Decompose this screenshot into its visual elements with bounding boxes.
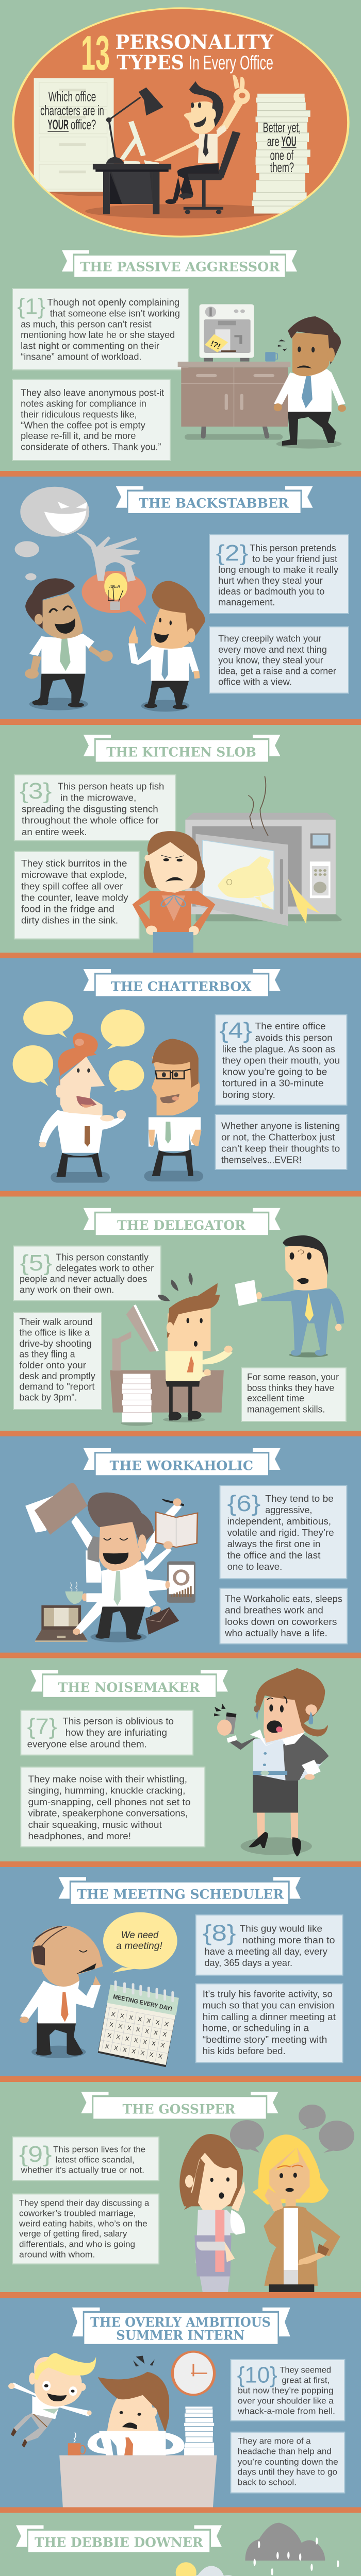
illustration: two gossiping women (179, 2105, 354, 2292)
heading: the meeting scheduler: THE MEETING SCHEDULER (77, 1887, 284, 1902)
text box: headache: days until they have to go (238, 2467, 337, 2477)
text box: make noise: headphones, and more! (28, 1831, 131, 1841)
text box: 5 (13, 1246, 161, 1300)
text box: 7: {7} (27, 1714, 57, 1739)
heading: the backstabber (116, 486, 313, 513)
text box: favorite activity (196, 1984, 343, 2063)
section: the delegator (0, 1196, 361, 1436)
text box: steal your idea: every move and next thing (218, 645, 327, 655)
text box: headache: They are more of a (238, 2436, 311, 2446)
bubble text: We need (121, 1930, 159, 1941)
text box: 6: {6} (227, 1491, 260, 1516)
text box: 8: nothing more than to (242, 1935, 335, 1945)
text box: can't keep thoughts (216, 1114, 347, 1170)
text box: burritos: dirty dishes in the sink. (21, 915, 118, 925)
text box: 4: {4} (219, 1018, 252, 1043)
text box: 10: but now they’re popping (238, 2386, 334, 2396)
calendar text: XXXXXXX (109, 2021, 168, 2038)
text box: 4: The entire office (255, 1021, 326, 1031)
illustration: boss handing work to stressed worker (110, 1235, 344, 1426)
text box: 7: This person is oblivious to (62, 1716, 174, 1726)
title: In Every Office (189, 52, 273, 74)
text box: 4: like the plague. As soon as (222, 1044, 335, 1054)
heading: the gossiper: THE GOSSIPER (123, 2102, 235, 2116)
calendar text: XXXXXXX (110, 2010, 169, 2028)
text box: 5: This person constantly (56, 1252, 149, 1263)
text box: eats sleeps breathes: who actually have a life. (224, 1628, 327, 1638)
text box: post-it notes: their ridiculous requests like, (21, 409, 137, 419)
text box: 4: boring story. (222, 1090, 275, 1100)
illustration: woman shouting on phone (214, 1668, 329, 1857)
section: the backstabber (0, 477, 361, 725)
bubble text (116, 1930, 162, 1952)
text box: can't keep thoughts: themselves...EVER! (221, 1155, 302, 1165)
text box: 1: “insane” amount of workload. (21, 351, 142, 362)
text box: favorite activity: “bedtime story” meeting with (203, 2035, 327, 2045)
illustration: confused man and raincloud woman (155, 2523, 340, 2576)
text box: headache: back to school. (238, 2477, 297, 2487)
hero circle illustration (13, 8, 348, 236)
section: the gossiper (0, 2082, 361, 2298)
text box: make noise: They make noise with their whistling, (28, 1774, 187, 1785)
text box: eats sleeps breathes: looks down on coworkers (225, 1617, 337, 1627)
text box: headache: headache than help and (238, 2446, 332, 2456)
text box: burritos: microwave that explode, (21, 870, 127, 880)
question on paper stack: YOU (282, 133, 296, 149)
text box: steal your idea: you know, they steal your (218, 655, 323, 666)
text box: favorite activity: him calling a dinner meeting at (203, 2012, 336, 2022)
question on paper stack: Better yet, (263, 120, 301, 135)
text box: drive-by shooting: back by 3pm". (20, 1392, 77, 1402)
text box: 1 (12, 289, 188, 370)
text box: discussing coworkers (12, 2194, 159, 2264)
text box: 1: that someone else isn’t working (50, 308, 180, 318)
text box: can't keep thoughts: can’t keep their thoughts to (221, 1144, 340, 1154)
text box: make noise: gum-snapping, cell phones not set to (28, 1797, 191, 1807)
heading: the overly ambitious summer intern (72, 2308, 290, 2344)
section: the noisemaker (0, 1658, 361, 1867)
text box: 2: ideas or badmouth you to (218, 586, 324, 597)
question on filing cabinet: characters are in (40, 103, 104, 118)
text box: drive-by shooting: desk and promptly (20, 1371, 95, 1381)
text box: steal your idea: office with a view. (218, 676, 292, 687)
text box: post-it notes: They also leave anonymous post-it (21, 387, 164, 398)
text box: make noise: singing, humming, knuckle cracking, (28, 1786, 185, 1796)
text box: 5: {5} (20, 1250, 52, 1276)
text box: time management: For some reason, your (247, 1372, 339, 1382)
text box: 1: as much, this person can’t resist (21, 319, 152, 330)
text box: 5: people and never actually does (20, 1274, 147, 1284)
text box: 4: they open their mouth, you (222, 1055, 340, 1065)
calendar text: XXXXXXX (104, 2043, 163, 2060)
illustration: meeting man, bubble and calendar (20, 1912, 179, 2067)
illustration: multitasking workaholic (25, 1483, 198, 1642)
heading: the overly ambitious summer intern: THE OVERLY AMBITIOUS (90, 2315, 271, 2330)
text box: 3: throughout the whole office for (22, 815, 159, 825)
text box: 9: latest office scandal, (56, 2155, 135, 2165)
question on paper stack: them? (270, 160, 294, 175)
text box: make noise (21, 1767, 205, 1847)
text box: 6: the office and the last (227, 1550, 320, 1561)
text box: 2: to be your friend just (252, 554, 337, 564)
question on filing cabinet: YOUR (47, 117, 69, 132)
text box: 5: any work on their own. (20, 1285, 114, 1295)
text box: make noise: chair squeaking, music without (28, 1820, 162, 1830)
text box: burritos (14, 851, 139, 939)
text box: drive-by shooting: as they fling a (20, 1349, 75, 1360)
text box: 9: {9} (19, 2142, 52, 2167)
text box: 8: {8} (203, 1921, 236, 1946)
section: the workaholic (0, 1436, 361, 1658)
text box: drive-by shooting: demand to "report (20, 1382, 95, 1392)
text box: eats sleeps breathes (220, 1588, 347, 1644)
section: the meeting scheduler (0, 1867, 361, 2082)
text box: 2: This person pretends (250, 543, 336, 553)
text box: drive-by shooting: the office is like a (20, 1328, 90, 1338)
text box: 6 (220, 1485, 347, 1579)
text box: 4: know you’re going to be (222, 1066, 327, 1077)
illustration: coffee machine and annoyed man (178, 304, 346, 449)
text box: can't keep thoughts: Whether anyone is listening (221, 1121, 340, 1131)
text box: drive-by shooting: Their walk around (20, 1317, 93, 1327)
question on filing cabinet (40, 89, 104, 132)
text box: 6: They tend to be (265, 1494, 334, 1504)
steam from microwave (248, 776, 268, 836)
section: header and the passive aggressor (0, 0, 361, 477)
heading: the meeting scheduler (59, 1877, 301, 1904)
text box: 2: long enough to make it really (218, 565, 338, 575)
illustration: intern, worker, clock and desk (8, 2352, 217, 2507)
question on filing cabinet: Which office (48, 89, 96, 105)
question on filing cabinet: office? (71, 117, 96, 132)
text box: post-it notes: please re-fill it, and be more (21, 431, 136, 441)
text box: time management: excellent time (247, 1393, 304, 1403)
heading: the chatterbox: THE CHATTERBOX (111, 979, 252, 994)
text box: 3: {3} (20, 778, 52, 804)
text box: post-it notes: “When the coffee pot is empty (21, 420, 145, 431)
text box: 6: volatile and rigid. They’re (227, 1528, 334, 1538)
heading: the debbie downer: THE DEBBIE DOWNER (35, 2535, 203, 2550)
text box: 9 (12, 2137, 159, 2181)
calendar text (104, 1993, 173, 2060)
text box: 3: an entire week. (22, 827, 87, 837)
title: 13 (81, 26, 110, 80)
text box: discussing coworkers: They spend their day discussing a (19, 2198, 150, 2208)
text box: 3: spreading the disgusting stench (22, 804, 158, 815)
text box: time management (241, 1368, 346, 1421)
text box: 4 (216, 1015, 347, 1105)
text box: 7: how they are infuriating (65, 1727, 167, 1738)
text box: 3: in the microwave, (60, 792, 136, 803)
title: TYPES (117, 50, 184, 74)
text box: 4: tortured in a 30-minute (222, 1078, 324, 1089)
text box: 6: aggressive, (265, 1505, 312, 1515)
text box: burritos: They stick burritos in the (21, 858, 127, 869)
heading: the chatterbox (84, 969, 281, 996)
text box: eats sleeps breathes: and breathes work and (225, 1605, 323, 1616)
text box: 10: whack-a-mole from hell. (237, 2406, 335, 2416)
text box: 2 (209, 535, 349, 614)
text box: 8 (196, 1915, 343, 1975)
text box: 6: always the first one in (227, 1539, 320, 1549)
text box: can't keep thoughts: or not, the Chatterbox just (221, 1132, 335, 1143)
text box: headache (231, 2432, 344, 2493)
text box: 10 (231, 2360, 344, 2421)
text box: steal your idea: idea, get a raise and a corner (218, 666, 336, 676)
heading: the passive aggressor (62, 250, 297, 277)
text box: 7 (21, 1710, 193, 1755)
heading: the gossiper (81, 2092, 278, 2119)
text box: favorite activity: his kids before bed. (203, 2046, 286, 2056)
section: the chatterbox (0, 958, 361, 1196)
text box: burritos: they spill coffee all over (21, 881, 123, 891)
text box: 8: This guy would like (240, 1924, 322, 1934)
text box: post-it notes: notes asking for compliance in (21, 399, 146, 409)
text box: 3 (14, 775, 176, 841)
illustration: microwave, fish and angry woman (133, 813, 342, 953)
bulb label: IDEA (109, 584, 120, 589)
text box: 5: delegates work to other (56, 1263, 154, 1273)
text box: 4: avoids this person (255, 1032, 333, 1043)
text box: discussing coworkers: coworker’s troubled marriage, (19, 2208, 136, 2218)
text box: drive-by shooting: drive-by shooting (20, 1338, 92, 1349)
heading: the workaholic (84, 1448, 281, 1475)
text box: 8: day, 365 days a year. (204, 1958, 292, 1968)
text box: 10: great at first, (282, 2375, 330, 2385)
text box: discussing coworkers: weird eating habits, who’s on the (19, 2218, 147, 2229)
section: the overly ambitious summer intern (0, 2298, 361, 2513)
text box: steal your idea (209, 626, 349, 693)
heading: the overly ambitious summer intern: SUMMER INTERN (116, 2328, 244, 2343)
section: the debbie downer (0, 2513, 361, 2576)
text box: favorite activity: It’s truly his favorite activity, so (203, 1989, 333, 1999)
heading: the debbie downer (16, 2526, 222, 2552)
title: PERSONALITY (115, 30, 274, 54)
text box: 1: mentioning how late he or she stayed (21, 330, 175, 340)
text box: drive-by shooting: folder onto your (20, 1360, 86, 1370)
heading: the workaholic: THE WORKAHOLIC (109, 1458, 253, 1473)
text box: post-it notes (12, 379, 170, 461)
calendar text: MEETING EVERY DAY! (112, 1993, 173, 2012)
text box: favorite activity: home, or scheduling in a (203, 2023, 309, 2033)
bubble text: a meeting! (116, 1941, 162, 1952)
text box: 1: last night or commenting on their (21, 341, 159, 351)
question on paper stack: one of (270, 148, 293, 163)
text box: discussing coworkers: differentials, and who is going (19, 2239, 135, 2249)
text box: time management: management skills. (247, 1404, 325, 1415)
text box: 10: They seemed (280, 2365, 331, 2375)
text box: 7: everyone else around them. (27, 1739, 147, 1749)
text box: burritos: the counter, leave moldy (21, 892, 128, 903)
calendar text: XXXXXXX (107, 2031, 166, 2049)
text box: 2: {2} (216, 540, 249, 566)
section: the kitchen slob (0, 725, 361, 958)
illustration: chatterbox and bored coworker (13, 1001, 203, 1183)
text box: 10: over your shoulder like a (238, 2396, 334, 2405)
text box: 9: This person lives for the (53, 2144, 145, 2154)
text box: eats sleeps breathes: The Workaholic eats, sleeps (225, 1594, 342, 1604)
text box: 6: one to leave. (227, 1562, 282, 1572)
text box: 9: whether it’s actually true or not. (21, 2165, 144, 2175)
heading: the kitchen slob (84, 735, 281, 761)
text box: make noise: vibrate, speakerphone conversations, (28, 1808, 188, 1819)
text box: 2: management. (218, 597, 275, 607)
heading: the delegator (84, 1208, 281, 1235)
text box: discussing coworkers: around with whom. (19, 2249, 95, 2259)
text box: headache: you’re counting down the (238, 2457, 338, 2467)
text box: burritos: food in the fridge and (21, 904, 114, 914)
text box: time management: boss thinks they have (247, 1383, 334, 1393)
text box: steal your idea: They creepily watch your (218, 634, 321, 644)
text box: 6: independent, ambitious, (227, 1516, 331, 1527)
text box: 1: Though not openly complaining (47, 297, 179, 308)
text box: discussing coworkers: verge of getting fired, salary (19, 2229, 127, 2239)
heading: the delegator: THE DELEGATOR (117, 1218, 245, 1233)
question on paper stack: are (267, 133, 280, 149)
text box: 2: hurt when they steal your (218, 575, 323, 586)
heading: the kitchen slob: THE KITCHEN SLOB (106, 744, 256, 759)
text box: drive-by shooting (13, 1312, 102, 1410)
heading: the backstabber: THE BACKSTABBER (139, 496, 289, 511)
heading: the noisemaker: THE NOISEMAKER (58, 1680, 200, 1695)
text box: 1: {1} (18, 294, 45, 319)
text box: 10: {10} (237, 2363, 277, 2387)
text box: post-it notes: considerate of others. Thank you.” (21, 442, 161, 452)
text box: 8: have a meeting all day, every (204, 1946, 327, 1957)
heading: the passive aggressor: THE PASSIVE AGGRESSOR (80, 259, 280, 274)
illustration: backstabber stealing the idea (15, 487, 205, 711)
title (81, 26, 274, 80)
text box: 3: This person heats up fish (58, 782, 164, 792)
question on paper stack (263, 120, 301, 175)
post-it mark: !?! (209, 339, 222, 351)
heading: the noisemaker (31, 1670, 228, 1697)
text box: favorite activity: much so that you can envision (203, 2001, 334, 2011)
